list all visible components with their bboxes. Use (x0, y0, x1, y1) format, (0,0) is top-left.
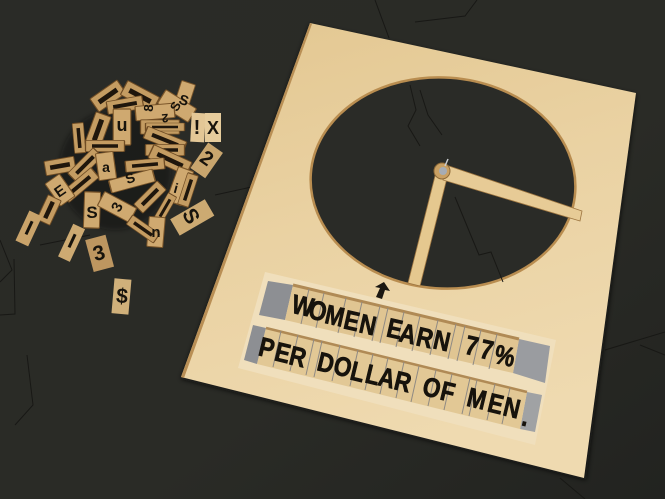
tile: dollar sign (111, 278, 131, 315)
letter tiles: WOMEN EARN 77%: E (341, 305, 362, 338)
pile of loose letter tiles: 8 (141, 104, 156, 112)
pile of loose letter tiles: n (151, 224, 161, 241)
letter tiles: WOMEN EARN 77%: 7 (477, 334, 496, 366)
tile: exclamation mark: ! (194, 117, 200, 139)
letter tiles: WOMEN EARN 77%: E (384, 313, 405, 346)
tile: 3 (85, 235, 114, 272)
circular pie chart cut-out (303, 69, 583, 297)
pile of loose letter tiles: i (172, 180, 180, 196)
letter tiles: PER DOLLAR OF MEN.: R (391, 366, 414, 399)
letter tiles: WOMEN EARN 77% (285, 285, 519, 373)
letter tiles: PER DOLLAR OF MEN. (256, 328, 532, 433)
letter tiles: PER DOLLAR OF MEN.: F (437, 376, 458, 409)
tile: 3: 3 (91, 241, 108, 266)
pivot bolt (434, 159, 450, 179)
tile: S: S (177, 204, 204, 228)
lighter strip behind letter rows (238, 272, 556, 445)
letter tiles: PER DOLLAR OF MEN.: A (375, 362, 398, 395)
letter tiles: WOMEN EARN 77%: M (322, 299, 347, 333)
pile of loose letter tiles: S (177, 91, 191, 109)
letter tiles: PER DOLLAR OF MEN.: O (331, 351, 355, 384)
panel: laser-cut wooden board (181, 23, 636, 478)
tile: 2 (190, 143, 223, 178)
pile of loose letter tiles: 2 (161, 111, 169, 125)
letter tiles: PER DOLLAR OF MEN.: E (272, 337, 294, 370)
letter tiles: PER DOLLAR OF MEN.: D (314, 347, 337, 380)
pile of loose letter tiles: S (167, 98, 184, 114)
letter tiles: WOMEN EARN 77%: N (356, 309, 379, 342)
tile: dollar sign: $ (115, 285, 129, 308)
letter tiles: PER DOLLAR OF MEN.: R (286, 341, 309, 374)
pile of loose letter tiles: a (102, 159, 110, 175)
tile: I (15, 211, 42, 246)
tile: I lower (58, 224, 85, 262)
letter tiles: WOMEN EARN 77%: 7 (462, 330, 481, 362)
letter tiles: WOMEN EARN 77%: % (492, 339, 518, 373)
letter tiles: PER DOLLAR OF MEN.: E (485, 388, 507, 421)
pile of loose letter tiles: n (116, 117, 128, 137)
letter tiles: PER DOLLAR OF MEN.: P (256, 332, 278, 365)
tile: exclamation mark (190, 113, 206, 142)
tape: row 2 right (520, 392, 542, 432)
pile of loose letter tiles: 3 (108, 200, 127, 215)
board shadow (181, 25, 636, 480)
letter tiles: PER DOLLAR OF MEN.: M (464, 382, 489, 416)
tape: row 1 left (259, 281, 293, 320)
tile: S (170, 199, 214, 236)
letter tiles: WOMEN EARN 77%: N (430, 325, 453, 358)
pie chart arm: angled to 77 percent (443, 164, 582, 221)
pile of loose letter tiles: E (51, 182, 69, 201)
letter tiles: PER DOLLAR OF MEN.: O (420, 372, 444, 405)
tile: I lower: I (64, 230, 79, 253)
icon: pointer arrow (375, 282, 390, 299)
letter tiles: WOMEN EARN 77%: O (306, 295, 330, 328)
tile: X: X (207, 118, 219, 138)
pile of loose letter tiles: S (123, 169, 137, 187)
letter tiles: PER DOLLAR OF MEN.: L (362, 359, 383, 392)
letter tiles: WOMEN EARN 77%: R (413, 322, 436, 355)
tile: 2: 2 (196, 147, 217, 171)
tile: I: I (21, 217, 36, 240)
pile of loose letter tiles (37, 80, 198, 248)
tape: row 2 left (244, 325, 266, 364)
tape: row 1 right (513, 339, 550, 383)
pie chart arm: vertical (408, 176, 447, 286)
letter tiles: PER DOLLAR OF MEN.: L (347, 356, 368, 389)
letter tiles: PER DOLLAR OF MEN.: N (500, 392, 523, 425)
pile shadow (59, 110, 171, 230)
letter tiles: PER DOLLAR OF MEN.: . (519, 402, 532, 433)
letter tiles: WOMEN EARN 77%: A (396, 318, 419, 351)
letter tiles: WOMEN EARN 77%: W (289, 289, 317, 324)
tile: X (205, 113, 221, 142)
pile of loose letter tiles: S (86, 203, 98, 222)
